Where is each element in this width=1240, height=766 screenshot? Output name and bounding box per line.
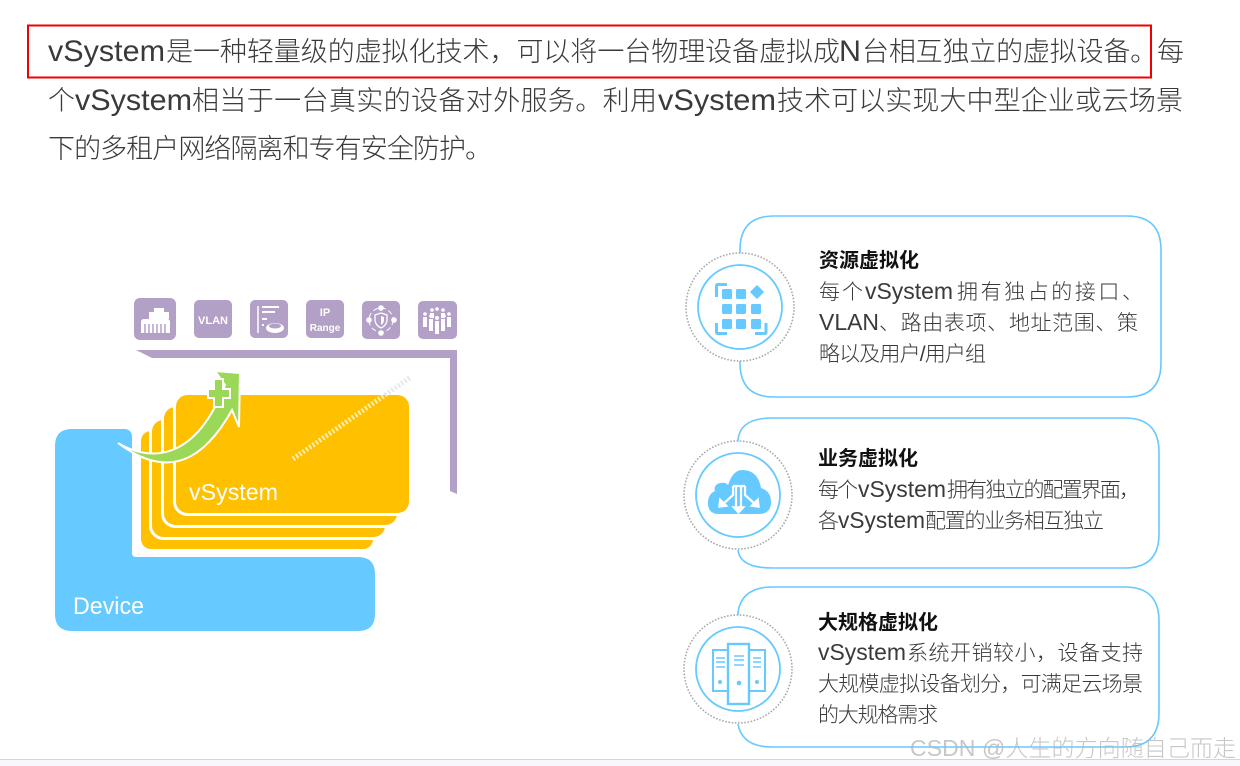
intro paragraph xyxy=(48,35,1184,164)
intro paragraph: vSystem xyxy=(658,84,776,117)
watermark: CSDN @人生的方向随自己而走 xyxy=(910,735,1236,761)
panel: service virtualization xyxy=(684,418,1159,568)
panel outline xyxy=(738,587,1159,747)
panel: resource virtualization xyxy=(686,216,1161,397)
panel text: 拥有独立的配置界面， xyxy=(947,479,1140,502)
resource icons row xyxy=(134,298,457,340)
green growth arrow xyxy=(118,371,240,462)
panel text: 资源虚拟化 xyxy=(819,249,919,272)
dashed projection line xyxy=(293,377,411,459)
panel text: 拥有独占的接口、 xyxy=(957,281,1143,304)
panel text: 业务虚拟化 xyxy=(818,447,918,470)
panel text: vSystem xyxy=(865,278,953,304)
diagram: device and vSystem xyxy=(55,298,457,631)
panel outline xyxy=(738,418,1159,568)
panel text: 每个 xyxy=(818,479,858,502)
panel text: vSystem xyxy=(818,639,906,665)
icon: VLAN: VLAN xyxy=(198,315,228,327)
intro paragraph: 技术可以实现大中型企业或云场景 xyxy=(777,86,1183,116)
icon: servers xyxy=(684,615,792,723)
panel text: 的大规格需求 xyxy=(818,704,938,727)
intro paragraph: vSystem xyxy=(75,84,192,117)
icon: IP range: IP xyxy=(320,307,330,319)
panel text: 系统开销较小，设备支持 xyxy=(907,642,1143,665)
panel text: VLAN xyxy=(819,309,879,335)
icon: IP range xyxy=(306,300,344,338)
panel text xyxy=(819,249,1143,366)
red highlight box xyxy=(28,26,1151,78)
purple bracket xyxy=(136,350,457,494)
panel text: 略以及用户/用户组 xyxy=(819,343,986,366)
footer divider xyxy=(0,758,1240,760)
intro paragraph: vSystem xyxy=(48,35,165,68)
icon: users xyxy=(418,301,457,339)
page footer strip xyxy=(0,759,1240,766)
intro paragraph: 相当于一台真实的设备对外服务。利用 xyxy=(192,86,657,116)
panel text: 大规模虚拟设备划分，可满足云场景 xyxy=(818,673,1143,696)
panel text: 每个 xyxy=(819,281,863,304)
icon: network port xyxy=(134,298,176,340)
icon: VLAN xyxy=(194,300,232,338)
panel text: 各 xyxy=(818,510,839,533)
icon: security policy xyxy=(362,301,400,339)
icon: routing table xyxy=(250,300,288,338)
panel: large-scale virtualization xyxy=(684,587,1159,747)
stacked vSystem cards: vSystem xyxy=(189,479,278,505)
panel text xyxy=(818,447,1140,533)
intro paragraph: 个 xyxy=(48,86,75,116)
panel outline xyxy=(740,216,1161,397)
stacked vSystem cards xyxy=(141,394,410,549)
panel text: 、路由表项、地址范围、策 xyxy=(879,312,1138,335)
intro paragraph: 下的多租户网络隔离和专有安全防护。 xyxy=(48,134,492,164)
icon: IP range: Range xyxy=(310,323,341,334)
intro paragraph: N xyxy=(839,35,861,68)
icon: cloud xyxy=(684,441,792,549)
panel text xyxy=(818,611,1143,727)
panel text: 配置的业务相互独立 xyxy=(925,510,1104,533)
icon: resource grid xyxy=(686,253,794,361)
intro paragraph: 台相互独立的虚拟设备。每 xyxy=(862,37,1184,67)
intro paragraph: 是一种轻量级的虚拟化技术，可以将一台物理设备虚拟成 xyxy=(166,37,840,67)
panel text: 大规格虚拟化 xyxy=(818,611,938,634)
panel text: vSystem xyxy=(858,476,946,502)
panel text: vSystem xyxy=(838,507,925,533)
device block xyxy=(55,429,375,631)
device block: Device xyxy=(73,593,144,620)
